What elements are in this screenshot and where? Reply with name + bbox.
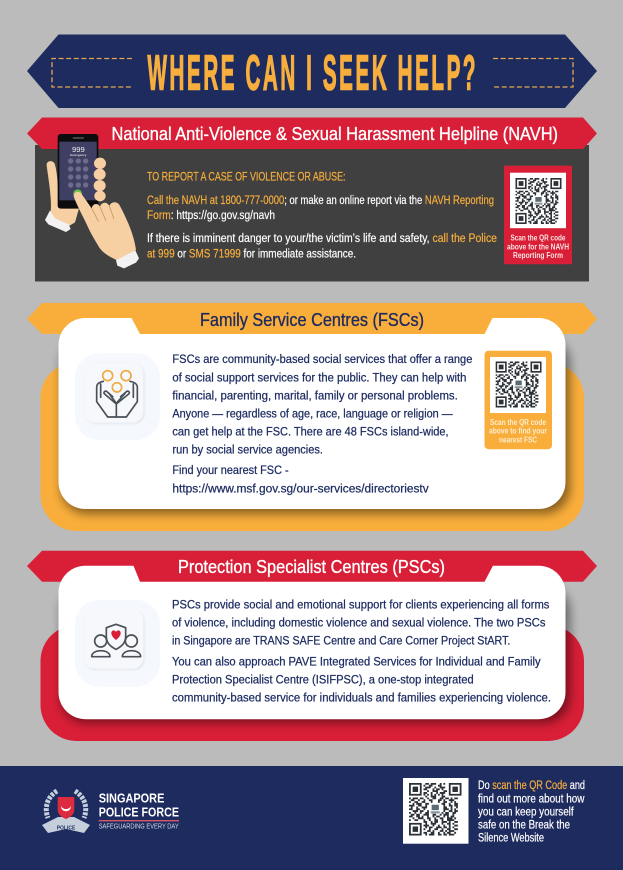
QR code card: NAVH reporting form [504, 166, 572, 264]
NAVH heading banner [27, 118, 597, 149]
PSC heading tab [133, 556, 494, 582]
PSC body text: Protection Specialist Centre (ISIFPSC), a one-stop integrated [172, 672, 474, 686]
PSC body text: PSCs provide social and emotional support for clients experiencing all forms [172, 597, 549, 611]
panel: Protection Specialist Centres [27, 551, 597, 741]
panel: NAVH helpline [27, 118, 597, 282]
footer band [0, 766, 623, 870]
footer text: Silence Website [478, 830, 544, 844]
title banner [27, 34, 597, 108]
footer text: safe on the Break the [478, 817, 570, 831]
NAVH body text: Form: https://go.gov.sg/navh [147, 208, 275, 222]
FSC body text: financial, parenting, marital, family or personal problems. [172, 388, 458, 402]
FSC heading tab: Family Service Centres (FSCs) [200, 309, 424, 330]
Singapore Police Force logo: SAFEGUARDING EVERY DAY [99, 824, 179, 831]
FSC body text: Find your nearest FSC - [172, 463, 289, 477]
QR code card: NAVH reporting form: above for the NAVH [507, 242, 569, 251]
QR code card: find nearest FSC [484, 351, 552, 449]
NAVH body text: If there is imminent danger to your/the victim’s life and safety, call the Police [147, 231, 497, 245]
Singapore Police Force logo: POLICE FORCE [99, 806, 179, 820]
FSC body text [172, 352, 472, 495]
Singapore Police Force logo [42, 791, 179, 833]
NAVH heading banner: National Anti-Violence & Sexual Harassment Helpline (NAVH) [112, 123, 558, 144]
footer text [478, 778, 585, 844]
PSC body text: You can also approach PAVE Integrated Services for Individual and Family [172, 654, 541, 668]
QR code card: NAVH reporting form: Scan the QR code [510, 234, 566, 243]
QR code: Break the Silence website [403, 778, 468, 844]
icon: shield with heart and people [75, 600, 160, 687]
NAVH body text [147, 170, 497, 261]
FSC body text: Anyone — regardless of age, race, language or religion — [172, 406, 453, 420]
police emblem: POLICE [57, 826, 76, 832]
NAVH body text: at 999 or SMS 71999 for immediate assistance. [147, 247, 356, 261]
FSC body text: https://www.msf.gov.sg/our-services/directoriestv [172, 481, 429, 495]
FSC body text: can get help at the FSC. There are 48 FSCs island-wide, [172, 424, 449, 438]
FSC heading tab [131, 309, 493, 334]
FSC body text: FSCs are community-based social services that offer a range [172, 352, 472, 366]
panel: Family Service Centres [27, 303, 597, 531]
PSC body text: of violence, including domestic violence and sexual violence. The two PSCs [172, 615, 545, 629]
footer text: find out more about how [478, 791, 584, 805]
QR code card: find nearest FSC: above to find your [489, 427, 547, 436]
QR code card: NAVH reporting form: Reporting Form [513, 251, 563, 260]
Singapore Police Force logo: SINGAPORE [99, 792, 164, 806]
QR code card: find nearest FSC: nearest FSC [499, 435, 537, 444]
FSC body text: of social support services for the public. They can help with [172, 370, 466, 384]
NAVH body text: TO REPORT A CASE OF VIOLENCE OR ABUSE: [147, 170, 346, 184]
title banner: WHERE CAN I SEEK HELP? [148, 45, 476, 100]
NAVH body text: Call the NAVH at 1800-777-0000; or make an online report via the NAVH Reporting [147, 193, 494, 207]
PSC body text: community-based service for individuals and families experiencing violence. [172, 690, 551, 704]
footer text: Do scan the QR Code and [478, 778, 585, 792]
PSC body text [172, 597, 551, 704]
PSC heading tab: Protection Specialist Centres (PSCs) [178, 556, 445, 577]
QR code card: find nearest FSC: Scan the QR code [490, 418, 546, 427]
footer text: you can keep yourself [478, 805, 574, 819]
PSC body text: in Singapore are TRANS SAFE Centre and Care Corner Project StART. [172, 633, 510, 647]
icon: hand dialling phone [45, 134, 139, 268]
icon: hand dialling phone: Emergency [70, 153, 87, 157]
icon: hand dialling phone: 999 [72, 145, 85, 154]
FSC body text: run by social service agencies. [172, 442, 323, 456]
icon: hands holding family [75, 353, 160, 440]
